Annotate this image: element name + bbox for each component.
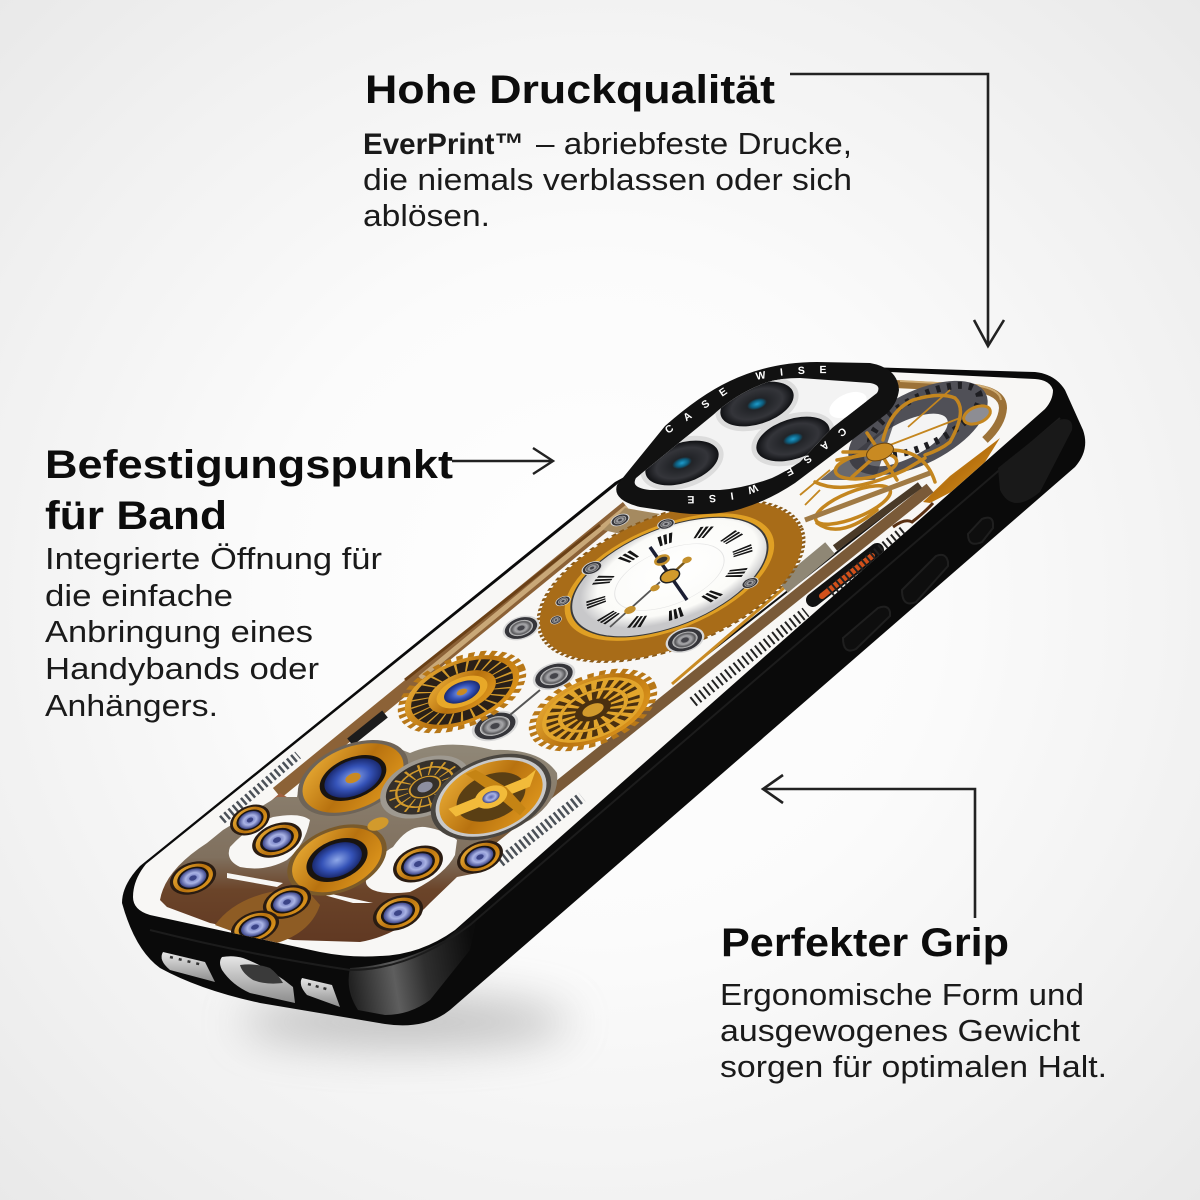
action slot xyxy=(998,419,1072,503)
description: Anhängers. xyxy=(45,688,218,723)
heading xyxy=(45,443,453,538)
description: ausgewogenes Gewicht xyxy=(720,1013,1080,1048)
text block: print quality xyxy=(363,68,852,233)
speaker left xyxy=(162,952,215,982)
description xyxy=(363,126,852,233)
clock hands xyxy=(610,547,693,627)
description: die niemals verblassen oder sich xyxy=(363,162,852,197)
rim highlight xyxy=(150,418,1060,970)
case artwork xyxy=(160,361,1003,950)
description xyxy=(720,977,1107,1084)
description: Handybands oder xyxy=(45,651,319,686)
camera lenses xyxy=(640,378,866,490)
brand text ring: CASE WISE xyxy=(666,366,826,432)
text block: strap point xyxy=(45,443,453,723)
charging port xyxy=(220,956,295,1003)
brand text ring: CASE WISE xyxy=(688,428,846,504)
orange element xyxy=(813,550,877,600)
lens large lower xyxy=(287,824,387,896)
long rods right xyxy=(460,485,930,865)
rack right xyxy=(500,797,582,862)
lens large upper left xyxy=(298,740,408,816)
description: sorgen für optimalen Halt. xyxy=(720,1049,1107,1084)
lens right xyxy=(752,412,834,466)
lens left xyxy=(640,436,724,490)
gold dial xyxy=(430,754,552,840)
phone shadow xyxy=(240,998,570,1046)
wedge and bolt near clock xyxy=(603,508,660,535)
rim bolts xyxy=(549,511,760,626)
bottom cluster xyxy=(215,888,320,945)
camera ring xyxy=(616,362,899,514)
clock xyxy=(536,501,806,663)
left rod xyxy=(277,507,627,793)
camera glass plate xyxy=(635,378,878,490)
heading: Perfekter Grip xyxy=(721,921,1009,965)
case body xyxy=(122,366,1085,1025)
spring xyxy=(693,530,905,702)
side buttons xyxy=(843,518,993,651)
description: Integrierte Öffnung für xyxy=(45,541,382,576)
description: EverPrint™ xyxy=(363,128,524,161)
heading: Befestigungspunkt xyxy=(45,443,453,487)
brand text ring xyxy=(666,366,846,504)
gear right xyxy=(528,668,658,752)
description: Anbringung eines xyxy=(45,614,313,649)
heading: für Band xyxy=(45,494,227,538)
camera bump xyxy=(616,362,899,514)
plate lenses xyxy=(170,740,552,943)
brass piece xyxy=(923,438,1000,503)
speaker right xyxy=(301,978,340,1007)
silver bolts xyxy=(468,611,708,747)
arrow: top xyxy=(790,74,1004,346)
description: Ergonomische Form und xyxy=(720,977,1084,1012)
text block: grip xyxy=(720,921,1107,1084)
heading: Hohe Druckqualität xyxy=(365,68,775,112)
description xyxy=(45,541,382,723)
bronze frame top right xyxy=(895,381,1003,440)
small lenses xyxy=(252,822,302,858)
rack left xyxy=(222,755,298,820)
screen surface xyxy=(133,372,1053,956)
mid gear xyxy=(380,756,466,818)
phone case xyxy=(122,362,1086,1026)
lens upper xyxy=(716,378,798,432)
description: ablösen. xyxy=(363,198,490,233)
gear left xyxy=(398,650,526,734)
clockwork wheel xyxy=(800,380,992,531)
arrow: strap point xyxy=(452,448,553,474)
description: – abriebfeste Drucke, xyxy=(536,126,852,161)
white cut-outs xyxy=(227,815,457,903)
bottom ports xyxy=(162,952,340,1007)
glossy bottom corner xyxy=(349,912,478,1015)
description: die einfache xyxy=(45,578,233,613)
arrow: grip xyxy=(763,775,975,918)
base plate xyxy=(160,745,557,942)
